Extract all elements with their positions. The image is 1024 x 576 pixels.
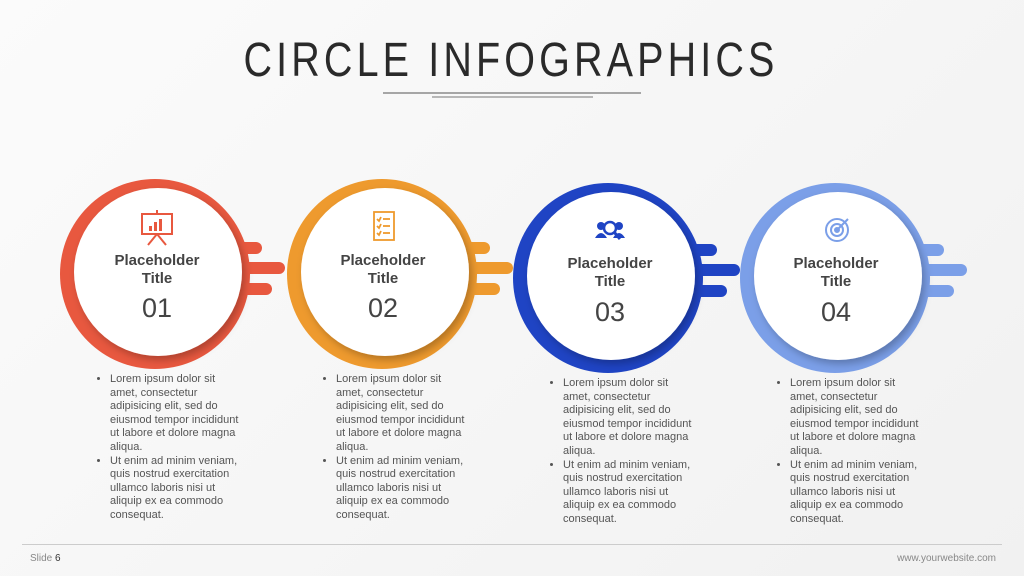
text block 2: Lorem ipsum dolor sit amet, consectetur adipisicing elit, sed do eiusmod tempor incididunt ut labore et dolore magna aliqua. <box>336 373 464 453</box>
text block 3 <box>550 377 692 525</box>
icon: presentation board <box>142 210 172 245</box>
text block 1: Lorem ipsum dolor sit amet, consectetur adipisicing elit, sed do eiusmod tempor incididunt ut labore et dolore magna aliqua. <box>110 373 238 453</box>
text block 3: Ut enim ad minim veniam, quis nostrud exercitation ullamco laboris nisi ut aliquip ex ea commodo consequat. <box>563 459 690 525</box>
circle 2: Placeholder <box>340 252 426 269</box>
circle 2 <box>287 179 507 369</box>
circle 4: Placeholder <box>793 255 879 272</box>
circle 3: Placeholder <box>567 255 653 272</box>
circle 3: Title <box>595 273 625 290</box>
footer: website: www.yourwebsite.com <box>897 553 996 564</box>
text block 1 <box>97 373 238 521</box>
circle 3 <box>513 183 734 373</box>
circle 2: 02 <box>368 293 398 323</box>
circle 4: 04 <box>821 297 851 327</box>
footer: slide number: Slide 6 <box>30 553 61 564</box>
text block 4 <box>777 377 918 525</box>
circle 1: Title <box>142 270 172 287</box>
circle 1 <box>60 179 279 369</box>
icon: target <box>826 219 848 241</box>
circle 4 <box>740 183 961 373</box>
circle 2: Title <box>368 270 398 287</box>
icon: people search <box>595 222 625 239</box>
circle 1: 01 <box>142 293 172 323</box>
text block 3: Lorem ipsum dolor sit amet, consectetur adipisicing elit, sed do eiusmod tempor incididunt ut labore et dolore magna aliqua. <box>563 377 691 457</box>
text block 2: Ut enim ad minim veniam, quis nostrud exercitation ullamco laboris nisi ut aliquip ex ea commodo consequat. <box>336 455 463 521</box>
circle 1: Placeholder <box>114 252 200 269</box>
title: CIRCLE INFOGRAPHICS <box>244 34 778 87</box>
icon: checklist <box>374 212 394 240</box>
text block 4: Ut enim ad minim veniam, quis nostrud exercitation ullamco laboris nisi ut aliquip ex ea commodo consequat. <box>790 459 917 525</box>
text block 4: Lorem ipsum dolor sit amet, consectetur adipisicing elit, sed do eiusmod tempor incididunt ut labore et dolore magna aliqua. <box>790 377 918 457</box>
text block 2 <box>323 373 464 521</box>
circle 3: 03 <box>595 297 625 327</box>
text block 1: Ut enim ad minim veniam, quis nostrud exercitation ullamco laboris nisi ut aliquip ex ea commodo consequat. <box>110 455 237 521</box>
circle 4: Title <box>821 273 851 290</box>
